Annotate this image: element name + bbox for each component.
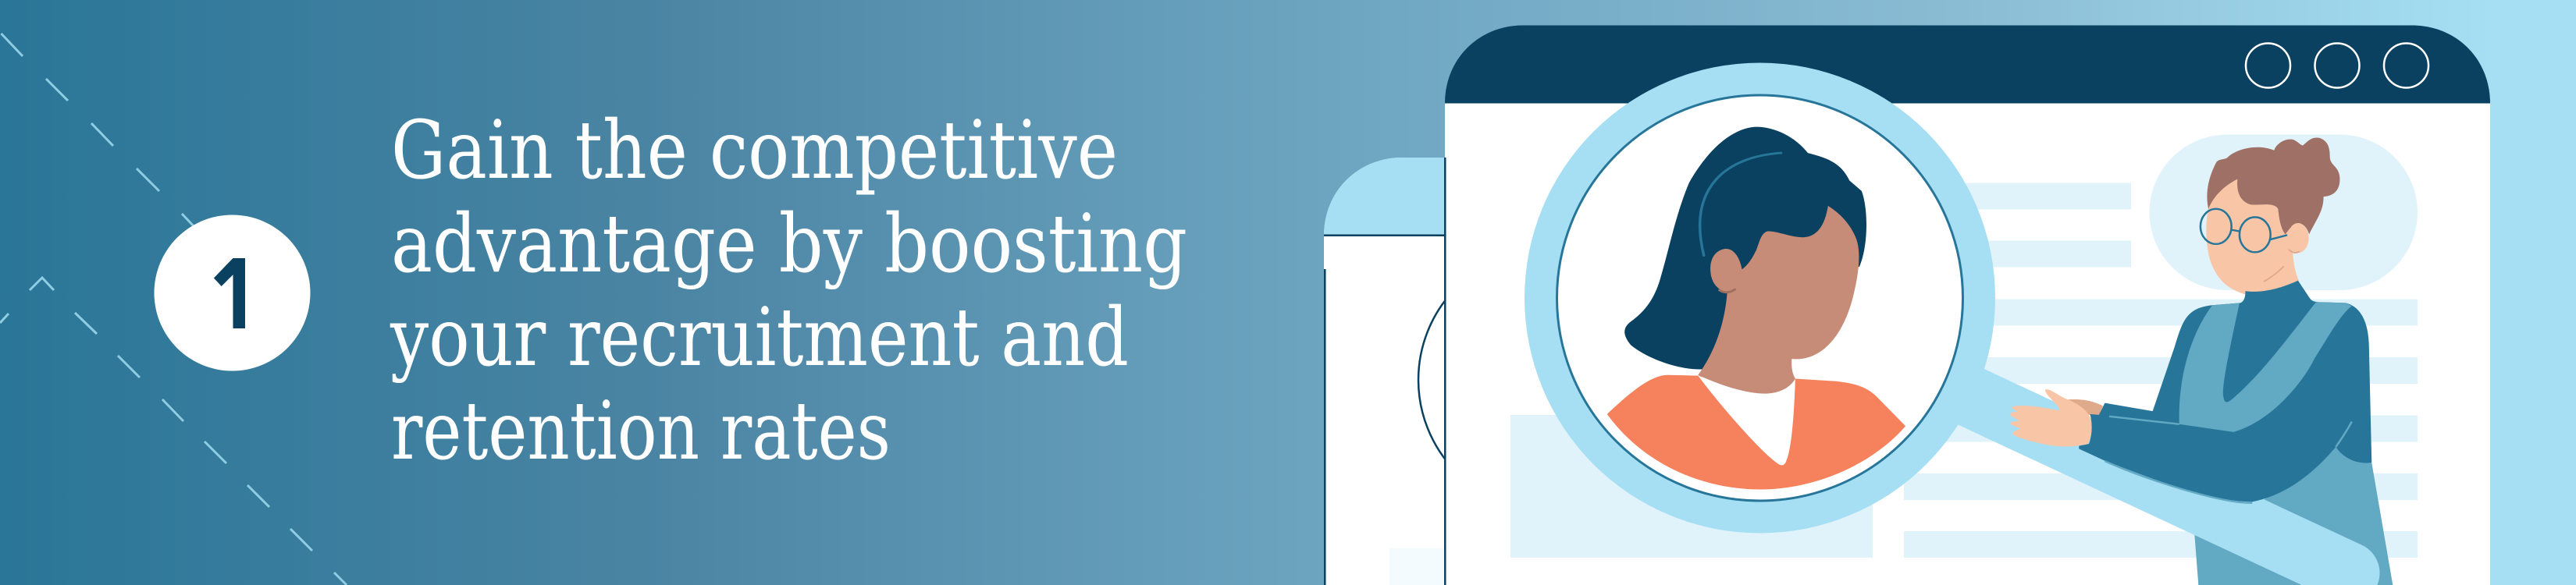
portrait blazer — [1607, 375, 1905, 490]
heading text: retention rates — [391, 385, 891, 478]
vest — [2179, 302, 2352, 432]
dashed diagonal lines — [0, 34, 347, 585]
heading text: advantage by boosting — [391, 197, 1187, 291]
page content placeholders — [1510, 134, 2418, 558]
back window header — [1324, 158, 1445, 236]
person upper body — [2010, 137, 2371, 503]
back hand — [2065, 399, 2103, 418]
portrait face and neck — [1698, 206, 1859, 394]
heading text: Gain the competitive — [391, 104, 1118, 197]
person lower body — [2194, 447, 2393, 585]
sweater and arm — [2079, 281, 2371, 502]
window header bar — [1445, 25, 2490, 103]
cheek and ear detail — [2265, 250, 2299, 282]
window control dots — [2246, 44, 2428, 87]
heading text — [390, 104, 1187, 478]
heading text: your recruitment and — [390, 291, 1129, 385]
portrait shirt — [1698, 376, 1795, 465]
back browser window — [1324, 158, 1681, 585]
face and neck — [2206, 179, 2299, 295]
number 1: 1 — [206, 238, 262, 350]
portrait hair — [1624, 127, 1866, 370]
sweater highlights — [2105, 417, 2352, 503]
number badge — [155, 215, 311, 371]
back window circle — [1418, 249, 1681, 511]
front hand — [2010, 389, 2092, 447]
magnifier lens — [1525, 62, 1995, 534]
glasses — [2201, 209, 2287, 252]
hair with bun — [2207, 137, 2339, 234]
magnifying glass — [1525, 62, 2349, 573]
magnifier handle — [1873, 351, 2349, 573]
candidate portrait in lens — [1607, 127, 1905, 490]
main browser window — [1444, 25, 2490, 585]
ear — [2287, 223, 2309, 253]
